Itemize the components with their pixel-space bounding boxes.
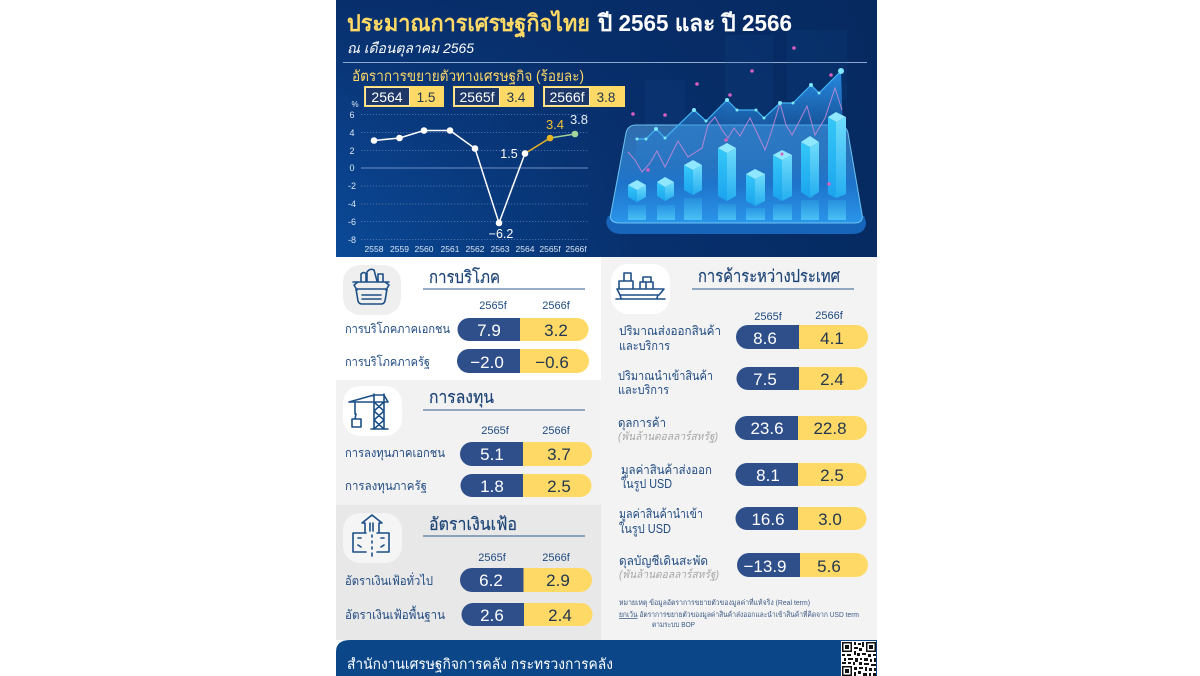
- row: export volume: 4.1: [820, 329, 844, 348]
- panel: investment: [343, 386, 592, 497]
- row: public consumption: [345, 349, 589, 373]
- panel: international trade: 2565f: [754, 311, 783, 323]
- line chart: economic growth: 4: [349, 128, 355, 138]
- row: public investment: การลงทุนภาครัฐ: [345, 479, 427, 494]
- line chart: economic growth: 2558: [365, 244, 384, 254]
- summary box 2566f: [543, 86, 625, 107]
- illustration: glowing tablet bar chart: [606, 30, 866, 234]
- row: headline inflation: 6.2: [479, 571, 503, 590]
- summary box 2565f: 2565f: [459, 89, 495, 105]
- line chart: economic growth: 2563: [491, 244, 510, 254]
- row: public investment: 2.5: [547, 477, 571, 496]
- icon: crane: [343, 386, 402, 436]
- line chart: economic growth: 2560: [415, 244, 434, 254]
- footnote: ยกเว้น อัตราการขยายตัวของมูลค่าสินค้าส่งออกและนำเข้าสินค้าที่คิดจาก USD term: [619, 609, 859, 619]
- row: export volume: [619, 324, 868, 353]
- row: private investment: 3.7: [547, 445, 571, 464]
- panel: investment: 2566f: [542, 425, 571, 437]
- row: private investment: [345, 442, 592, 466]
- row: current account: [619, 553, 868, 581]
- panel: consumption: 2565f: [479, 300, 508, 312]
- panel: investment: 2565f: [481, 425, 510, 437]
- row: public consumption: −0.6: [535, 353, 569, 372]
- page background panels: [336, 257, 877, 640]
- row: core inflation: อัตราเงินเฟ้อพื้นฐาน: [345, 605, 445, 622]
- line chart: economic growth: [348, 100, 588, 254]
- row: public investment: 1.8: [480, 477, 504, 496]
- footnote: หมายเหตุ ข้อมูลอัตราการขยายตัวของมูลค่าที่แท้จริง (Real term): [619, 597, 810, 607]
- bars: [628, 112, 846, 206]
- summary box 2565f: 3.4: [507, 90, 526, 105]
- row: public consumption: การบริโภคภาครัฐ: [345, 354, 430, 369]
- row: export volume: 8.6: [753, 329, 777, 348]
- line chart: economic growth: 2562: [466, 244, 485, 254]
- line chart: economic growth: 2566f: [565, 244, 587, 254]
- row: private investment: 5.1: [480, 445, 504, 464]
- line chart: economic growth: −6.2: [489, 227, 513, 241]
- summary box 2564: 1.5: [417, 90, 435, 105]
- line chart: economic growth: 2561: [441, 244, 460, 254]
- QR code: [841, 641, 876, 676]
- summary box 2564: 2564: [371, 89, 403, 105]
- title: ปี 2565 และ ปี 2566: [596, 10, 792, 36]
- row: trade balance: 22.8: [813, 419, 847, 438]
- row: trade balance: [618, 416, 867, 443]
- row: private consumption: [345, 318, 589, 341]
- row: trade balance: (พันล้านดอลลาร์สหรัฐ): [618, 430, 718, 443]
- row: core inflation: 2.4: [548, 606, 572, 625]
- row: headline inflation: [345, 568, 592, 592]
- row: private consumption: 3.2: [544, 321, 568, 340]
- line chart: economic growth: 2559: [390, 244, 409, 254]
- heading: การบริโภค: [429, 267, 500, 287]
- row: headline inflation: 2.9: [546, 571, 570, 590]
- row: export value: 2.5: [820, 466, 844, 485]
- title: ประมาณการเศรษฐกิจไทย: [347, 9, 590, 38]
- line chart: economic growth: %: [351, 100, 359, 109]
- row: import volume: ปริมาณนำเข้าสินค้า: [618, 369, 713, 383]
- row: current account: ดุลบัญชีเดินสะพัด: [619, 554, 708, 569]
- panel: international trade: 2566f: [815, 310, 844, 322]
- header panel: [336, 0, 877, 257]
- row: current account: (พันล้านดอลลาร์สหรัฐ): [619, 568, 719, 581]
- row: export value: มูลค่าสินค้าส่งออก: [621, 463, 712, 478]
- heading: อัตราเงินเฟ้อ: [429, 514, 517, 534]
- line chart: economic growth: -2: [348, 181, 356, 191]
- line chart: economic growth: 0: [349, 163, 355, 173]
- line chart: economic growth: 6: [349, 110, 355, 120]
- row: import volume: และบริการ: [618, 383, 669, 397]
- summary box 2565f: [453, 86, 534, 107]
- title: [347, 9, 792, 38]
- icon: shopping basket: [343, 265, 401, 315]
- row: export volume: และบริการ: [619, 339, 670, 353]
- row: private consumption: การบริโภคภาคเอกชน: [345, 321, 450, 336]
- row: export value: 8.1: [756, 466, 780, 485]
- row: trade balance: ดุลการค้า: [618, 416, 666, 431]
- footer bar: สำนักงานเศรษฐกิจการคลัง กระทรวงการคลัง: [347, 657, 613, 673]
- row: current account: −13.9: [743, 557, 787, 576]
- row: private investment: การลงทุนภาคเอกชน: [345, 446, 445, 461]
- heading: การลงทุน: [429, 387, 494, 408]
- footnote: [619, 597, 859, 629]
- row: import volume: 7.5: [753, 370, 777, 389]
- row: import volume: [618, 367, 868, 397]
- row: import value: ในรูป USD: [619, 522, 671, 537]
- line chart: economic growth: 3.4: [546, 117, 564, 132]
- chart heading: อัตราการขยายตัวทางเศรษฐกิจ (ร้อยละ): [352, 68, 584, 85]
- summary box 2564: [364, 86, 444, 107]
- summary box 2566f: 2566f: [549, 89, 585, 105]
- row: trade balance: 23.6: [750, 419, 784, 438]
- footer bar: [336, 640, 877, 676]
- line chart: economic growth: 1.5: [500, 147, 518, 161]
- line chart: economic growth: -4: [348, 199, 356, 209]
- row: import volume: 2.4: [820, 370, 844, 389]
- row: core inflation: [345, 603, 592, 626]
- row: headline inflation: อัตราเงินเฟ้อทั่วไป: [345, 572, 433, 588]
- panel: inflation: [343, 513, 592, 626]
- panel: consumption: [343, 265, 589, 373]
- row: private consumption: 7.9: [477, 321, 501, 340]
- row: export value: ในรูป USD: [621, 477, 672, 492]
- row: public consumption: −2.0: [470, 353, 504, 372]
- line chart: economic growth: 2565f: [539, 244, 561, 254]
- line chart: economic growth: 3.8: [570, 112, 588, 127]
- subtitle: ณ เดือนตุลาคม 2565: [347, 40, 474, 57]
- icon: cargo ship: [611, 264, 670, 314]
- row: current account: 5.6: [817, 557, 841, 576]
- row: public investment: [345, 474, 592, 497]
- footnote: ตามระบบ BOP: [652, 620, 695, 629]
- row: core inflation: 2.6: [480, 606, 504, 625]
- panel: inflation: 2565f: [478, 552, 507, 564]
- heading: การค้าระหว่างประเทศ: [698, 266, 840, 286]
- line chart: economic growth: 2564: [516, 244, 535, 254]
- summary box 2566f: 3.8: [597, 90, 615, 105]
- panel: international trade: [611, 264, 868, 629]
- panel: inflation: 2566f: [542, 552, 571, 564]
- row: import value: มูลค่าสินค้านำเข้า: [619, 507, 703, 522]
- row: import value: 16.6: [751, 510, 785, 529]
- row: import value: [619, 507, 866, 537]
- line chart: economic growth: -6: [348, 217, 356, 227]
- row: import value: 3.0: [818, 510, 842, 529]
- icon: rising arrow: [343, 513, 402, 563]
- panel: consumption: 2566f: [542, 300, 571, 312]
- line chart: economic growth: 2: [349, 146, 355, 156]
- row: export value: [621, 463, 866, 492]
- row: export volume: ปริมาณส่งออกสินค้า: [619, 324, 721, 338]
- line chart: economic growth: -8: [348, 235, 356, 245]
